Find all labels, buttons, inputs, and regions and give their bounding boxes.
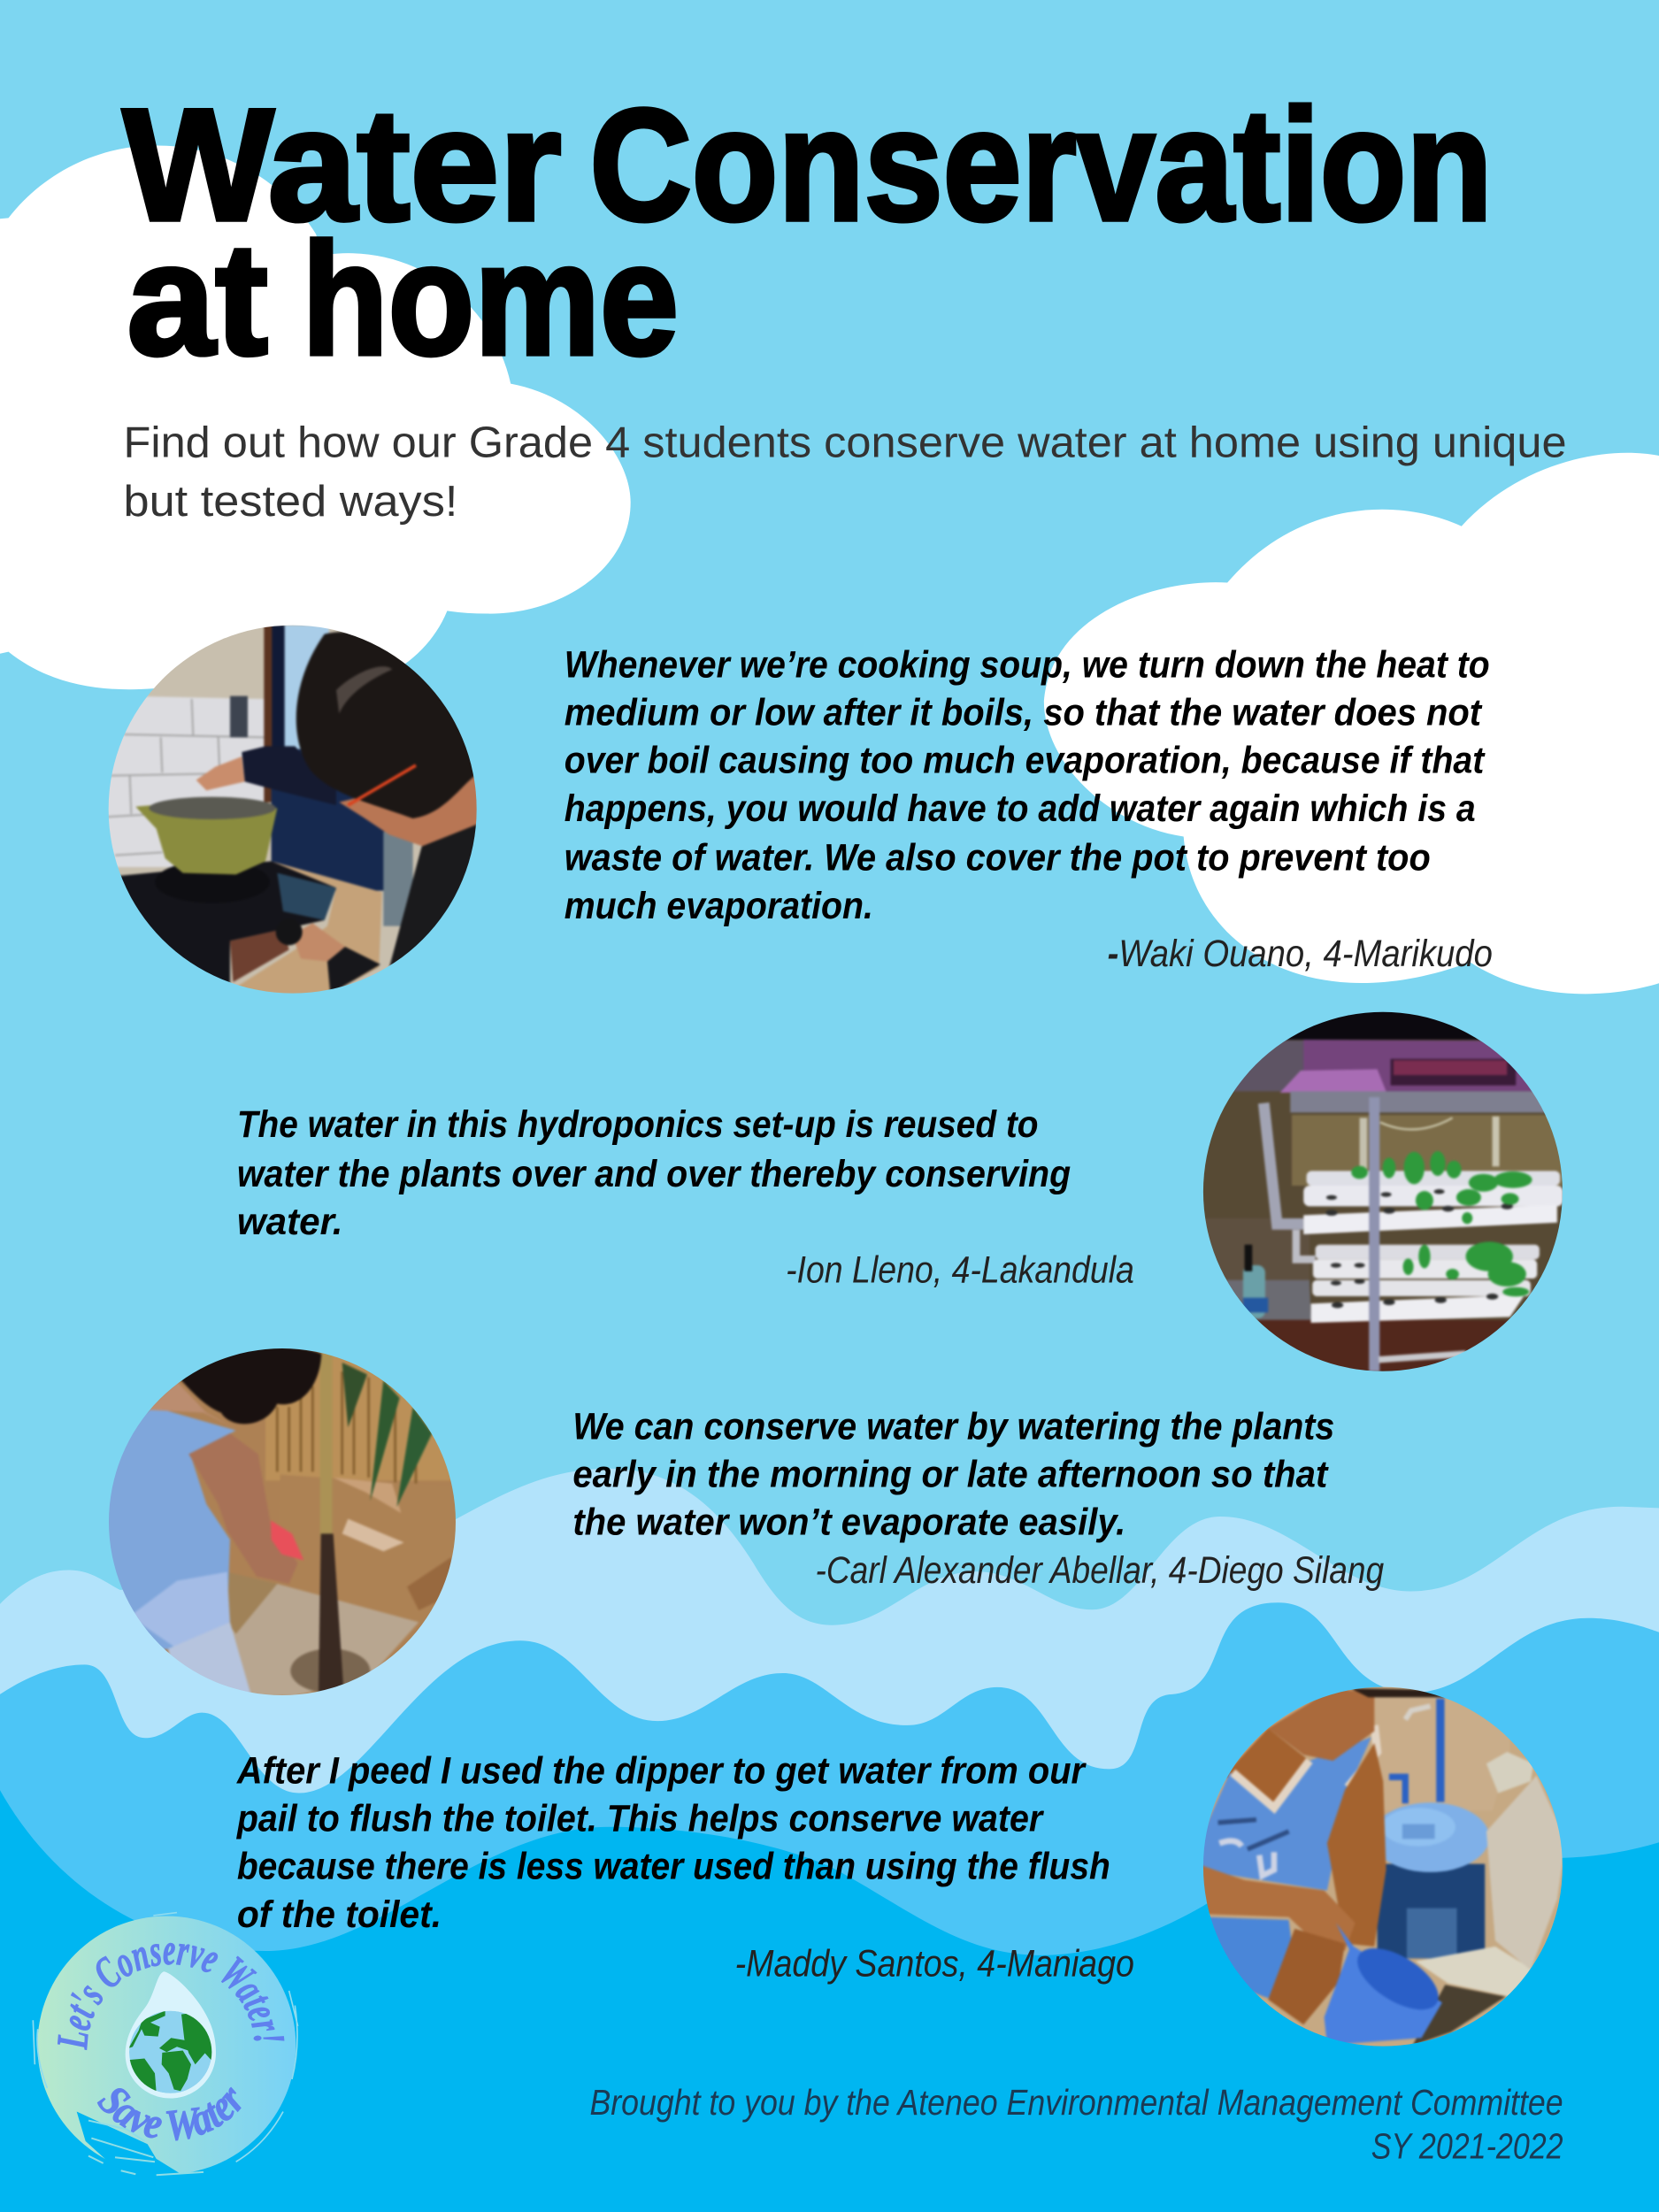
wave: light blue bbox=[0, 1469, 1659, 2212]
title: home bbox=[302, 211, 679, 388]
photo: boy cooking soup bbox=[108, 625, 477, 994]
quote: Ion Lleno: -Ion Lleno, 4-Lakandula bbox=[786, 1248, 1134, 1290]
subtitle: but tested ways! bbox=[124, 477, 457, 526]
quote: Ion Lleno: The water in this hydroponics set-up is reused to bbox=[237, 1103, 1038, 1145]
quote: Maddy Santos: After I peed I used the dipper to get water from our bbox=[236, 1749, 1087, 1791]
quote: Ion Lleno: water the plants over and over thereby conserving bbox=[237, 1153, 1071, 1194]
quote: Carl Alexander Abellar: -Carl Alexander Abellar, 4-Diego Silang bbox=[816, 1549, 1385, 1591]
title bbox=[123, 76, 1493, 388]
quote: Waki Ouano: medium or low after it boils, so that the water does not bbox=[565, 692, 1483, 733]
icon: globe bbox=[127, 2011, 217, 2093]
title: at bbox=[127, 211, 268, 388]
quote: Maddy Santos: pail to flush the toilet. This helps conserve water bbox=[236, 1798, 1045, 1839]
quote: Maddy Santos bbox=[236, 1749, 1134, 1985]
logo: Let's Conserve Water badge bbox=[32, 1911, 299, 2177]
cloud: top left bbox=[0, 145, 631, 689]
quote: Waki Ouano: -Waki Ouano, 4-Marikudo bbox=[1108, 933, 1493, 974]
quote: Carl Alexander Abellar bbox=[572, 1405, 1385, 1591]
quote: Carl Alexander Abellar: the water won’t evaporate easily. bbox=[572, 1502, 1125, 1543]
quote: Waki Ouano bbox=[565, 643, 1493, 974]
badge curved text bottom: Save Water bbox=[97, 2086, 242, 2141]
title: Water bbox=[123, 76, 562, 254]
badge curved text top: Let's Conserve Water! bbox=[57, 1943, 285, 2051]
wave: medium blue bbox=[0, 1602, 1659, 2212]
footer credit: SY 2021-2022 bbox=[1371, 2125, 1563, 2166]
quote: Carl Alexander Abellar: early in the morning or late afternoon so that bbox=[572, 1453, 1329, 1494]
quote: Waki Ouano: Whenever we’re cooking soup, we turn down the heat to bbox=[565, 643, 1490, 685]
subtitle: Find out how our Grade 4 students conserve water at home using unique bbox=[124, 418, 1567, 466]
quote: Maddy Santos: of the toilet. bbox=[237, 1893, 442, 1935]
quote: Maddy Santos: because there is less water used than using the flush bbox=[237, 1846, 1110, 1887]
quote: Waki Ouano: over boil causing too much evaporation, because if that bbox=[565, 740, 1486, 781]
footer credit bbox=[589, 2082, 1563, 2166]
quote: Waki Ouano: happens, you would have to add water again which is a bbox=[565, 787, 1476, 829]
wave: deep blue bbox=[0, 1749, 1659, 2212]
photo: hydroponics set-up bbox=[1203, 1012, 1563, 1371]
quote: Carl Alexander Abellar: We can conserve water by watering the plants bbox=[572, 1405, 1334, 1447]
title: Conservation bbox=[589, 76, 1493, 254]
quote: Waki Ouano: waste of water. We also cover the pot to prevent too bbox=[565, 837, 1431, 879]
photo: child watering plants bbox=[109, 1348, 456, 1695]
icon: water drop bbox=[126, 1971, 216, 2099]
cloud: right bbox=[1044, 453, 1659, 994]
quote: Ion Lleno bbox=[237, 1103, 1134, 1290]
photo: child flushing with dipper bbox=[1203, 1686, 1563, 2047]
badge brushed disc bbox=[33, 1913, 298, 2179]
quote: Ion Lleno: water. bbox=[237, 1201, 342, 1242]
quote: Waki Ouano: much evaporation. bbox=[565, 885, 873, 926]
quote: Maddy Santos: -Maddy Santos, 4-Maniago bbox=[735, 1943, 1134, 1985]
subtitle bbox=[124, 418, 1567, 526]
